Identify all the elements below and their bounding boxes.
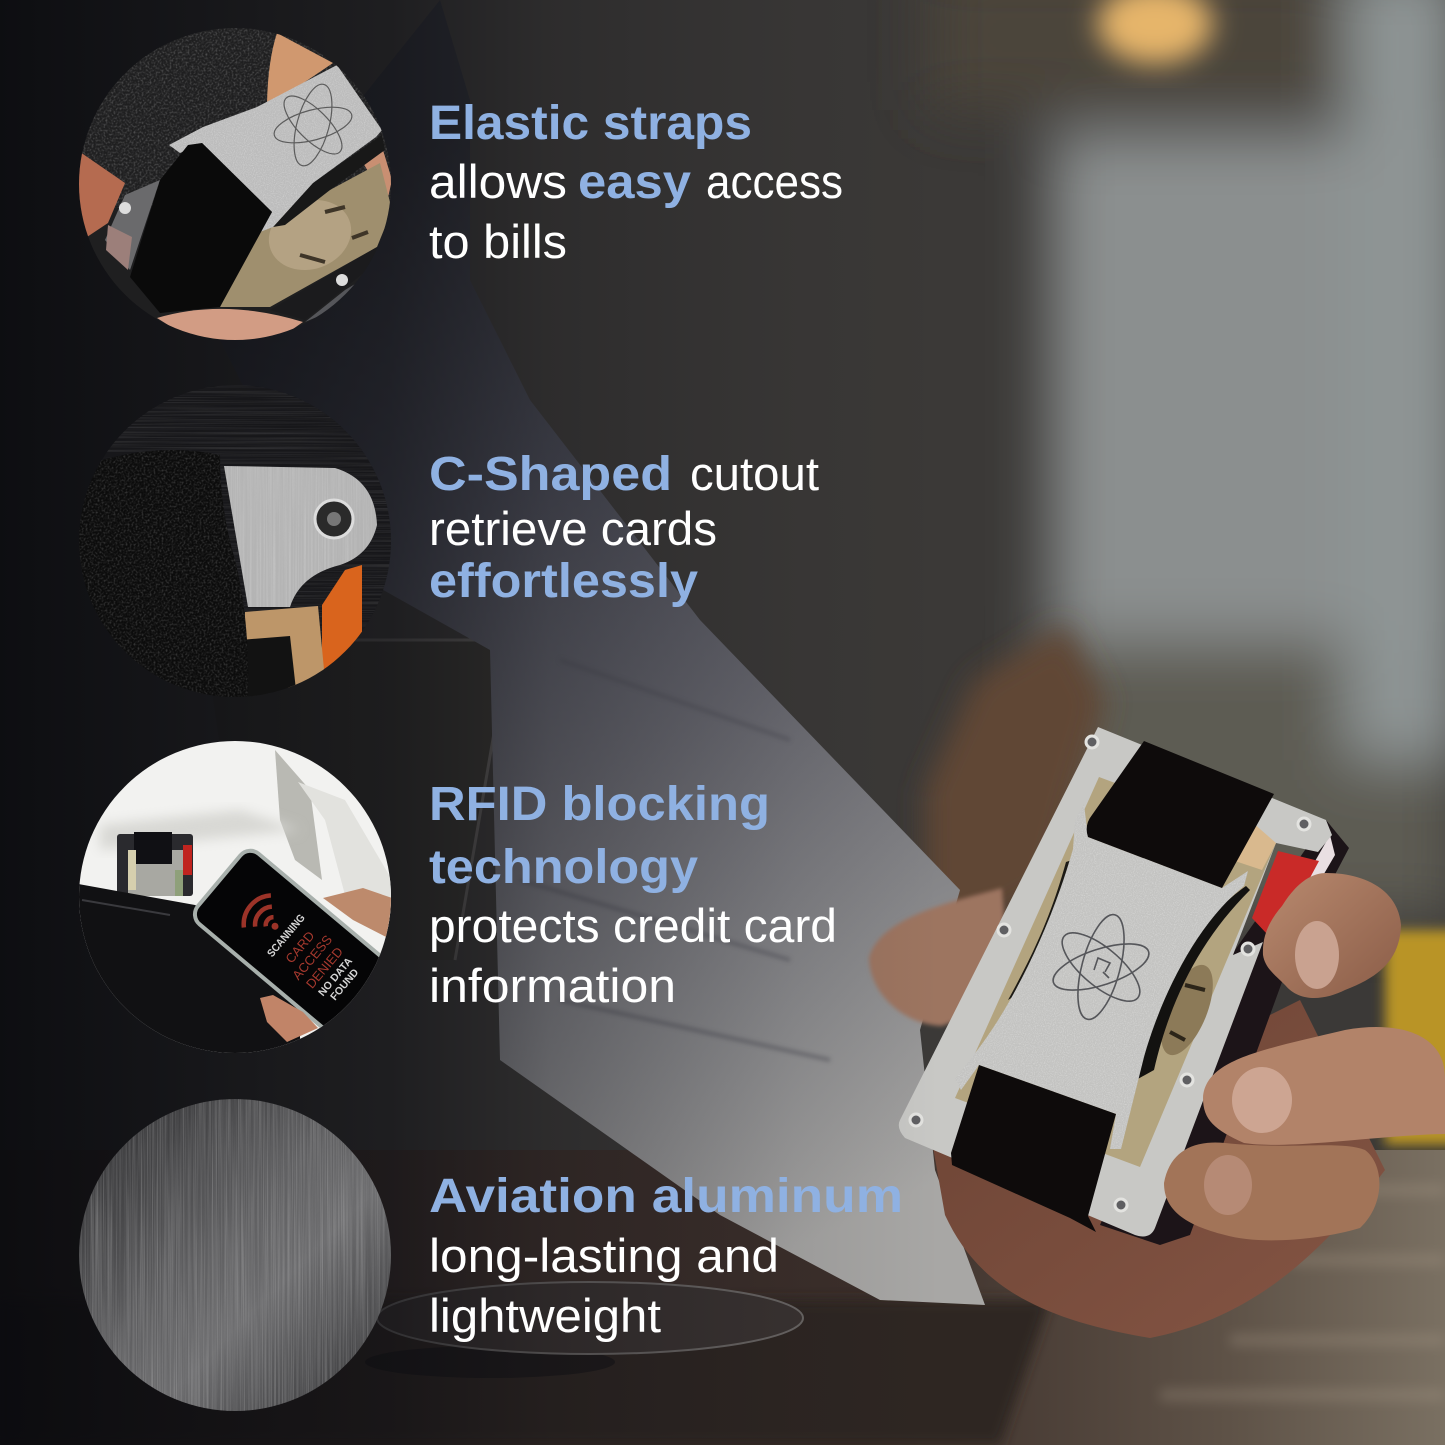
feature text: RFID blocking <box>429 778 837 1012</box>
phone: SCANNING <box>265 912 308 960</box>
black knit elastic <box>72 450 248 700</box>
plate slot shadows <box>1136 886 1250 1080</box>
hand behind phone <box>323 888 392 940</box>
index finger nail <box>1204 1155 1252 1215</box>
hand rear: palm and thumb <box>869 888 1385 1338</box>
phone: NO DATA <box>316 955 355 999</box>
middle finger <box>1203 1027 1445 1145</box>
screw <box>315 500 353 538</box>
feature text: aviation aluminum: lightweight <box>429 1289 661 1342</box>
feature text: C-shaped cutout: C-Shaped <box>429 448 672 501</box>
phone: DENIED <box>303 944 346 991</box>
circle photo: elastic strap <box>75 28 392 345</box>
glass <box>205 640 510 960</box>
feature text: elastic straps: access <box>706 155 843 208</box>
bottom finger <box>157 308 303 340</box>
feature text: aviation aluminum: Aviation aluminum <box>429 1170 903 1223</box>
white card edge <box>1290 835 1335 915</box>
atom logo <box>1048 910 1154 1024</box>
aluminum frame <box>899 727 1332 1236</box>
fingers over phone <box>260 995 318 1042</box>
money clip plate <box>955 804 1248 1149</box>
wallet frame and cards <box>105 180 160 270</box>
feature text: RFID blocking: technology <box>429 841 698 894</box>
metal plate <box>169 65 382 232</box>
palm <box>930 1000 1385 1338</box>
phone: FOUND <box>328 966 362 1003</box>
hand front: fingers <box>1164 873 1445 1240</box>
ring finger nail <box>1295 921 1339 989</box>
feature text: RFID blocking: protects credit card <box>429 899 837 952</box>
red card <box>1252 851 1319 934</box>
bill with portrait <box>220 163 392 307</box>
phone <box>192 848 380 1028</box>
bill <box>955 777 1276 1167</box>
circle photo: RFID blocking <box>78 741 411 1060</box>
top elastic strap <box>1087 741 1274 888</box>
feature text: C-shaped cutout: effortlessly <box>429 555 698 608</box>
shirt sleeve <box>200 0 985 1305</box>
shirt folds <box>275 750 322 880</box>
right finger <box>364 151 391 196</box>
fingertip top right <box>267 33 333 103</box>
feature text: RFID blocking: RFID blocking <box>429 778 770 831</box>
feature text: elastic straps <box>429 97 843 268</box>
blurred yellow object <box>1385 930 1445 1145</box>
feature text: elastic straps: Elastic straps <box>429 97 752 150</box>
feature text: elastic straps: to bills <box>429 215 567 268</box>
bill tips <box>1232 815 1276 870</box>
rivets <box>910 736 1310 1211</box>
black elastic <box>130 143 272 313</box>
mini wallet in pocket <box>117 832 193 896</box>
thumb <box>869 888 1010 1026</box>
left finger <box>79 154 125 236</box>
saucer <box>365 1282 803 1378</box>
ring finger <box>1263 873 1401 998</box>
tan card <box>245 606 325 690</box>
circle photo: brushed aluminum texture <box>79 1099 391 1411</box>
atom logo <box>274 84 352 166</box>
lamp glow <box>1097 0 1213 64</box>
bottom elastic strap <box>951 1065 1116 1232</box>
feature text: elastic straps: allows <box>429 155 567 208</box>
dark zip band <box>273 135 385 227</box>
lower frame <box>368 247 377 252</box>
phone: CARD <box>282 928 317 966</box>
table top <box>0 1150 1445 1445</box>
middle finger nail <box>1232 1067 1292 1133</box>
card stack <box>1100 820 1349 1245</box>
wallet <box>899 727 1349 1245</box>
feature text: C-shaped cutout: retrieve cards <box>429 502 717 555</box>
circle photo: C-shaped cutout <box>72 385 391 700</box>
orange card <box>322 565 362 670</box>
feature text: RFID blocking: information <box>429 959 676 1012</box>
black pants pocket <box>78 884 300 1060</box>
blurred wooden chair <box>925 625 1105 960</box>
wifi icon <box>241 893 274 928</box>
black card <box>246 636 296 696</box>
metal plate with cutout <box>224 466 377 607</box>
feature text: C-shaped cutout: cutout <box>690 447 819 500</box>
feature text: elastic straps: easy <box>578 156 691 209</box>
index finger <box>1164 1142 1379 1240</box>
feature text: aviation aluminum: long-lasting and <box>429 1229 779 1282</box>
bill portrait <box>1150 958 1224 1062</box>
feature text: aviation aluminum <box>429 1170 903 1342</box>
feature text: C-shaped cutout <box>429 447 819 608</box>
phone: ACCESS <box>289 932 335 983</box>
